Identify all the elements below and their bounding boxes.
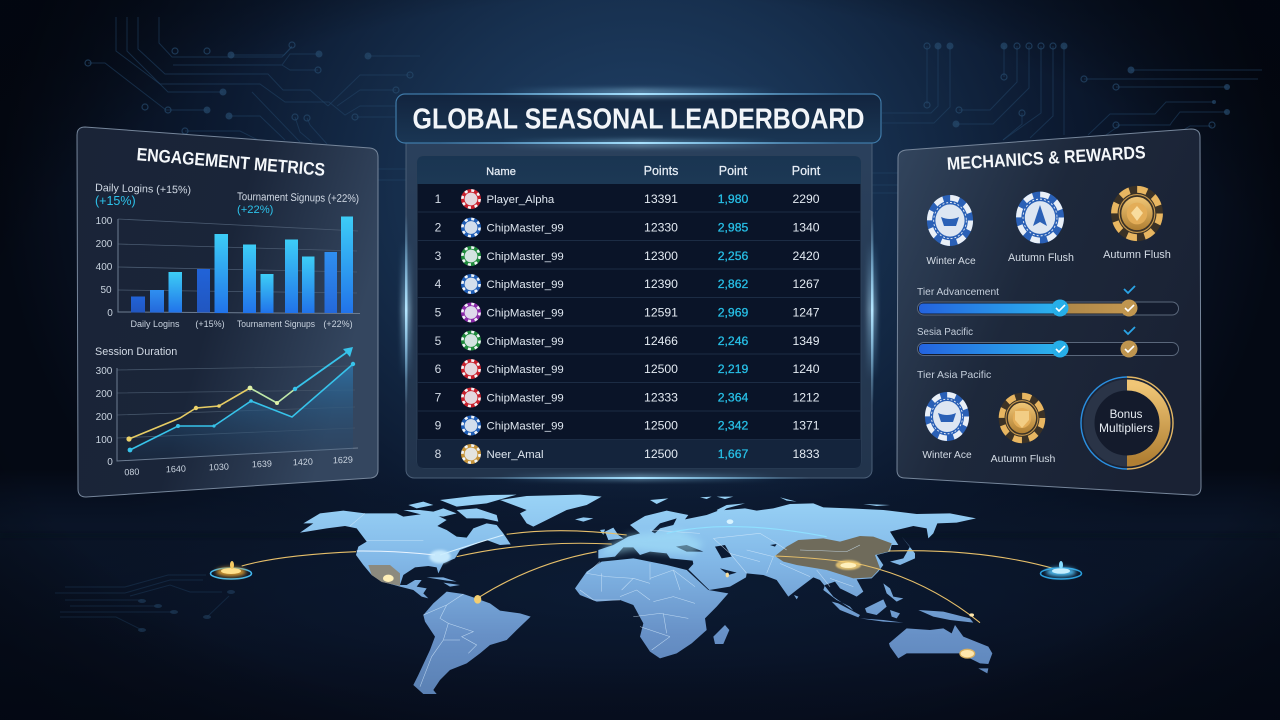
bar chart: Tournament Signups: [237, 319, 315, 329]
row 3: [435, 246, 820, 266]
chip: winter ace lower: Winter Ace: [922, 450, 972, 461]
europe glow: [600, 530, 703, 557]
row 8: 1212: [792, 390, 820, 404]
row 7: 12500: [644, 362, 678, 376]
bar chart: 100: [96, 216, 113, 227]
line chart: 1640: [166, 464, 186, 474]
chip: autumn flush lower: [991, 393, 1056, 465]
row 3: 2,256: [718, 249, 748, 263]
row 7: ChipMaster_99: [486, 364, 564, 376]
row 8: 2,364: [718, 390, 748, 404]
row 8: [435, 388, 820, 408]
panel: leaderboard: [401, 130, 877, 481]
row 2: [435, 218, 820, 238]
circuit traces top left: [85, 17, 420, 144]
chip: autumn flush blue: Autumn Flush: [1008, 252, 1074, 264]
row 2: ChipMaster_99: [486, 222, 564, 234]
progress: seria pacific: [917, 327, 1178, 358]
row 1: 1: [435, 192, 442, 206]
row 10: 8: [435, 447, 442, 461]
bar chart: [96, 216, 360, 329]
row 5: 1247: [792, 306, 820, 320]
table header: Name: [486, 166, 516, 178]
row 10: Neer_Amal: [486, 449, 543, 461]
line chart: 1639: [252, 459, 272, 469]
row 6: 5: [435, 334, 442, 348]
row 2: 2: [435, 220, 442, 234]
panel: mechanics and rewards: [897, 129, 1201, 495]
line chart: 1420: [293, 457, 313, 467]
row 4: 2,862: [718, 277, 748, 291]
table: [417, 156, 861, 468]
world map: [242, 495, 1057, 694]
chip: winter ace lower: [922, 392, 972, 461]
line chart: 300: [96, 366, 113, 377]
row 9: 2,342: [718, 418, 748, 432]
title banner: GLOBAL SEASONAL LEADERBOARD: [412, 104, 864, 136]
row 8: ChipMaster_99: [486, 392, 564, 404]
bar chart: Daily Logins: [130, 319, 180, 329]
chip: autumn flush gold: Autumn Flush: [1103, 249, 1171, 261]
bar chart: (+22%): [323, 319, 353, 329]
row 1: 1,980: [718, 192, 748, 206]
row 4: 4: [435, 277, 442, 291]
line chart: 1030: [209, 462, 229, 472]
row 2: 2,985: [718, 220, 748, 234]
row 5: [435, 302, 820, 322]
label: tier asia pacific: Tier Asia Pacific: [917, 369, 991, 381]
row 7: 6: [435, 362, 442, 376]
bar chart: 50: [100, 285, 112, 296]
bonus multipliers ring: [1081, 377, 1173, 469]
heading: mechanics and rewards: MECHANICS & REWARDS: [946, 142, 1146, 174]
row 5: ChipMaster_99: [486, 308, 564, 320]
table header: [417, 156, 861, 184]
panel glow edges: [401, 215, 877, 481]
row 2: 12330: [644, 220, 678, 234]
row 4: 1267: [792, 277, 820, 291]
circuit traces top right: [378, 42, 1262, 193]
table header: Point: [719, 164, 748, 178]
chip: autumn flush blue: [1008, 192, 1074, 264]
row 6: 12466: [644, 334, 678, 348]
progress: seria pacific: Sesia Pacific: [917, 327, 973, 338]
americas: [300, 495, 602, 694]
row 8: 12333: [644, 390, 678, 404]
circuit traces lower left: [55, 575, 235, 632]
bar chart: 0: [107, 308, 113, 319]
row 9: ChipMaster_99: [486, 420, 564, 432]
panel: engagement metrics: [77, 127, 378, 497]
row 1: 13391: [644, 192, 678, 206]
line chart: 1629: [333, 455, 353, 465]
row 9: 1371: [792, 418, 820, 432]
row 7: 2,219: [718, 362, 748, 376]
bar chart: (+15%): [195, 319, 225, 329]
row 9: [435, 416, 820, 436]
row 1: Player_Alpha: [486, 194, 555, 206]
heading: engagement metrics: ENGAGEMENT METRICS: [136, 144, 326, 180]
row 6: ChipMaster_99: [486, 336, 564, 348]
progress: tier advancement: Tier Advancement: [917, 286, 999, 298]
row 5: 5: [435, 306, 442, 320]
row 1: 2290: [792, 192, 820, 206]
legend: tournament signups: [237, 191, 359, 216]
row 8: 7: [435, 390, 442, 404]
right hub marker: [1040, 561, 1082, 579]
row 1: [435, 189, 820, 209]
line chart: 200: [96, 412, 113, 423]
row 5: 2,969: [718, 306, 748, 320]
row 3: ChipMaster_99: [486, 251, 564, 263]
row 3: 3: [435, 249, 442, 263]
row 5: 12591: [644, 306, 678, 320]
line chart: 100: [96, 435, 113, 446]
row 2: 1340: [792, 220, 820, 234]
row 9: 12500: [644, 418, 678, 432]
row 3: 2420: [792, 249, 820, 263]
row 4: ChipMaster_99: [486, 279, 564, 291]
line chart: 080: [124, 467, 140, 477]
line chart: 200: [96, 389, 113, 400]
legend: daily logins: [95, 182, 191, 208]
row 6: 1349: [792, 334, 820, 348]
africa and eurasia: [575, 497, 992, 673]
chip: winter ace: Winter Ace: [926, 256, 976, 267]
row 4: [435, 274, 820, 294]
arrow: trend: [343, 347, 353, 357]
country borders: [350, 513, 860, 687]
table header: Points: [644, 164, 678, 178]
chip: autumn flush gold: [1103, 186, 1171, 261]
table header: Point: [792, 164, 821, 178]
legend: daily logins: (+15%): [95, 194, 136, 208]
title banner: [396, 88, 881, 148]
row 7: [435, 359, 820, 379]
row 7: 1240: [792, 362, 820, 376]
left hub marker: [210, 561, 252, 579]
row 3: 12300: [644, 249, 678, 263]
location markers: [383, 519, 975, 658]
bar chart: 400: [96, 262, 113, 273]
row 4: 12390: [644, 277, 678, 291]
bonus multipliers ring: Multipliers: [1099, 421, 1153, 435]
row 10: [435, 444, 820, 464]
legend: tournament signups: (+22%): [237, 204, 274, 216]
chip: winter ace: [926, 195, 976, 267]
row 10: 1,667: [718, 447, 748, 461]
connection arcs: [242, 527, 1057, 623]
inland seas: [652, 518, 777, 575]
row 10: 1833: [792, 447, 820, 461]
legend: daily logins: Daily Logins (+15%): [95, 182, 191, 197]
row 10: 12500: [644, 447, 678, 461]
chip: autumn flush lower: Autumn Flush: [991, 453, 1056, 465]
line chart: 0: [107, 457, 113, 468]
bar chart: 200: [96, 239, 113, 250]
line chart: [96, 347, 358, 477]
highlighted regions: [368, 536, 892, 586]
heading: session duration: Session Duration: [95, 346, 177, 358]
progress: tier advancement: [917, 286, 1178, 316]
legend: tournament signups: Tournament Signups (+22%): [237, 191, 359, 205]
row 6: [435, 330, 820, 350]
row 6: 2,246: [718, 334, 748, 348]
row 9: 9: [435, 418, 442, 432]
bonus multipliers ring: Bonus: [1110, 408, 1143, 421]
